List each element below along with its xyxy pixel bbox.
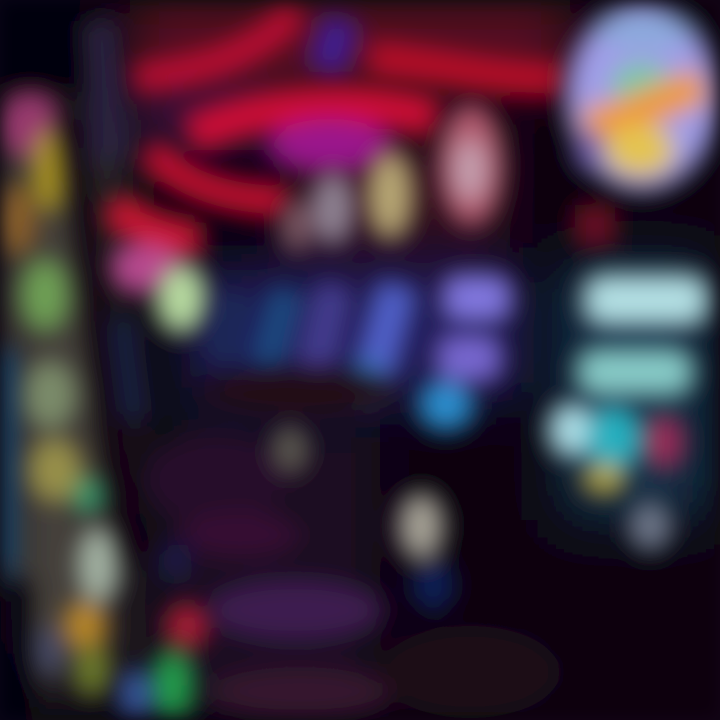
left column: multicoloured lit strip xyxy=(0,91,118,696)
screens: right machine bright panels xyxy=(550,205,707,550)
lights: lower floor accents xyxy=(120,426,453,718)
stools: dim purple seats xyxy=(145,368,560,718)
left column: blue edge and corners xyxy=(0,0,80,720)
ceiling: central red and magenta canopy xyxy=(109,105,435,292)
machine tops: glowing lights xyxy=(157,105,501,332)
pillar: dark vertical divider xyxy=(72,20,140,560)
screens: middle row of machines xyxy=(220,276,510,429)
ceiling: neon red streaks xyxy=(135,12,560,78)
sign: round top-right wheel xyxy=(568,5,716,189)
